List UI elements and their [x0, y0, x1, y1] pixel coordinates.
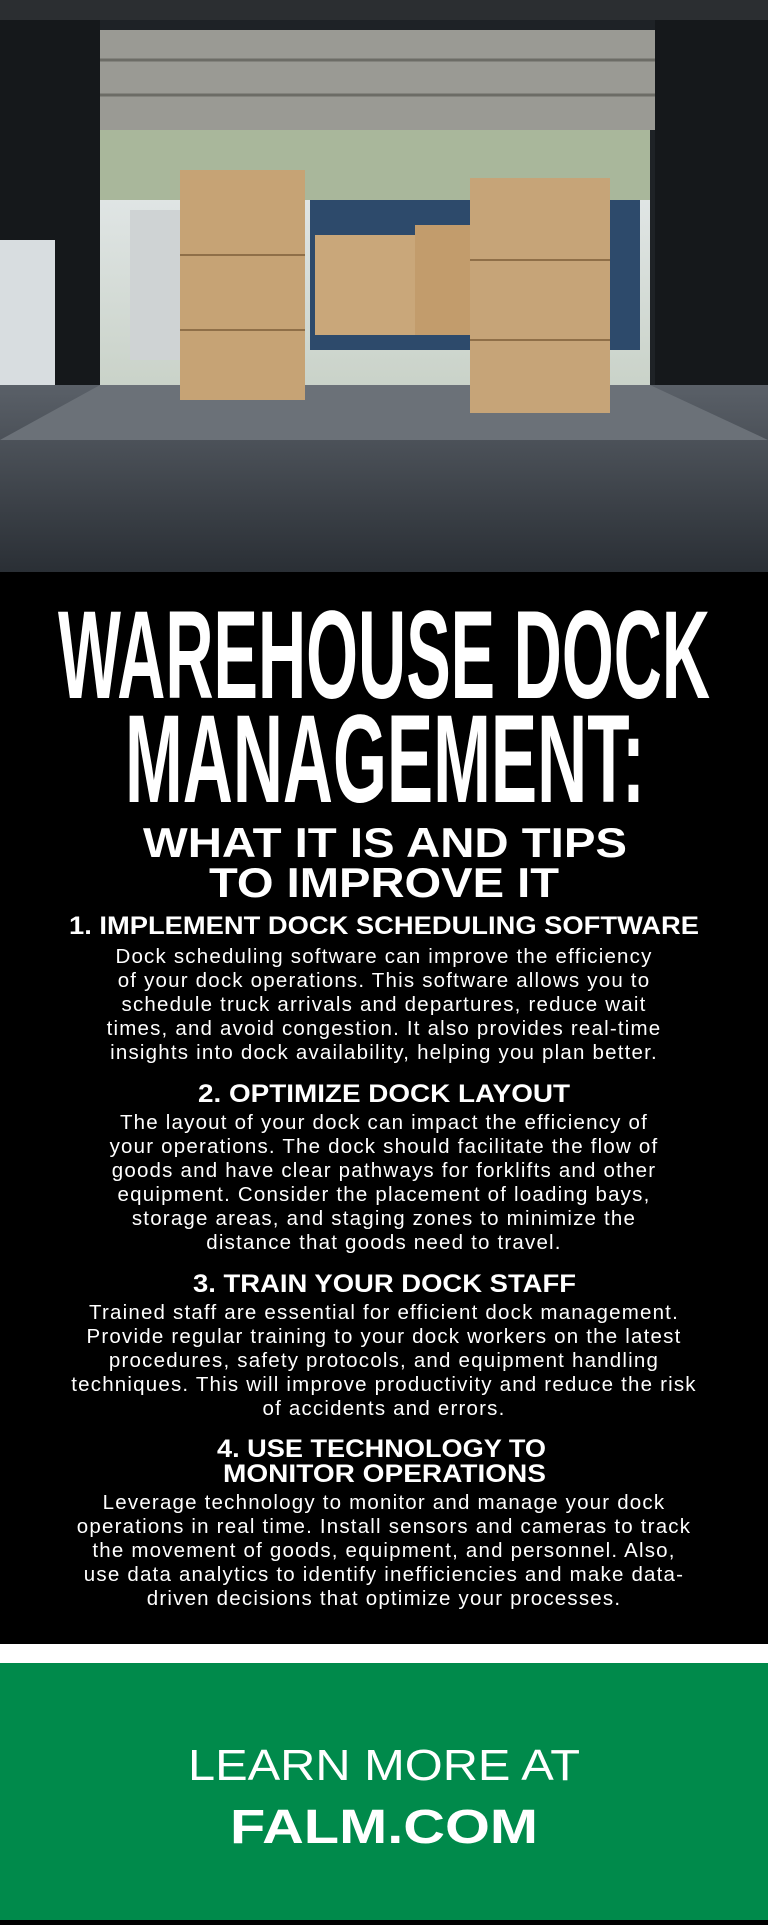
text 1: insights into dock availability, helping you plan better.: [110, 1041, 658, 1064]
text 3: [71, 1301, 697, 1420]
title: [58, 586, 710, 902]
text 3: Provide regular training to your dock workers on the latest: [87, 1325, 681, 1348]
text 3: of accidents and errors.: [262, 1397, 506, 1420]
text 1: [106, 945, 661, 1064]
title: WHAT IT IS AND TIPS: [143, 819, 627, 866]
white divider band: [0, 1644, 768, 1663]
text 4: the movement of goods, equipment, and personnel. Also,: [92, 1539, 676, 1562]
text 3: techniques. This will improve productivity and reduce the risk: [71, 1373, 697, 1396]
footer: learn more: LEARN MORE AT: [188, 1741, 580, 1790]
text 4: use data analytics to identify inefficiencies and make data-: [84, 1563, 684, 1586]
footer: learn more: FALM.COM: [230, 1801, 538, 1854]
text 2: distance that goods need to travel.: [206, 1231, 562, 1254]
text 3: Trained staff are essential for efficient dock management.: [89, 1301, 679, 1324]
text 3: procedures, safety protocols, and equipment handling: [109, 1349, 659, 1372]
text 2: your operations. The dock should facilitate the flow of: [110, 1135, 658, 1158]
heading 4: [217, 1435, 546, 1487]
text 2: storage areas, and staging zones to minimize the: [132, 1207, 636, 1230]
text 2: equipment. Consider the placement of loading bays,: [118, 1183, 650, 1206]
text 4: [77, 1491, 691, 1610]
header photo: warehouse dock: [0, 0, 768, 572]
text 1: times, and avoid congestion. It also provides real-time: [107, 1017, 661, 1040]
text 1: schedule truck arrivals and departures, reduce wait: [122, 993, 646, 1016]
text 1: of your dock operations. This software allows you to: [118, 969, 650, 992]
text 1: Dock scheduling software can improve the efficiency: [115, 945, 653, 968]
text 2: goods and have clear pathways for forklifts and other: [112, 1159, 656, 1182]
text 4: driven decisions that optimize your processes.: [147, 1587, 621, 1610]
text 4: Leverage technology to monitor and manage your dock: [103, 1491, 665, 1514]
heading 4: 4. USE TECHNOLOGY TO: [217, 1435, 546, 1463]
text 2: [110, 1111, 658, 1254]
text 2: The layout of your dock can impact the efficiency of: [120, 1111, 648, 1134]
footer: learn more: [0, 1663, 768, 1920]
text 4: operations in real time. Install sensors and cameras to track: [77, 1515, 691, 1538]
